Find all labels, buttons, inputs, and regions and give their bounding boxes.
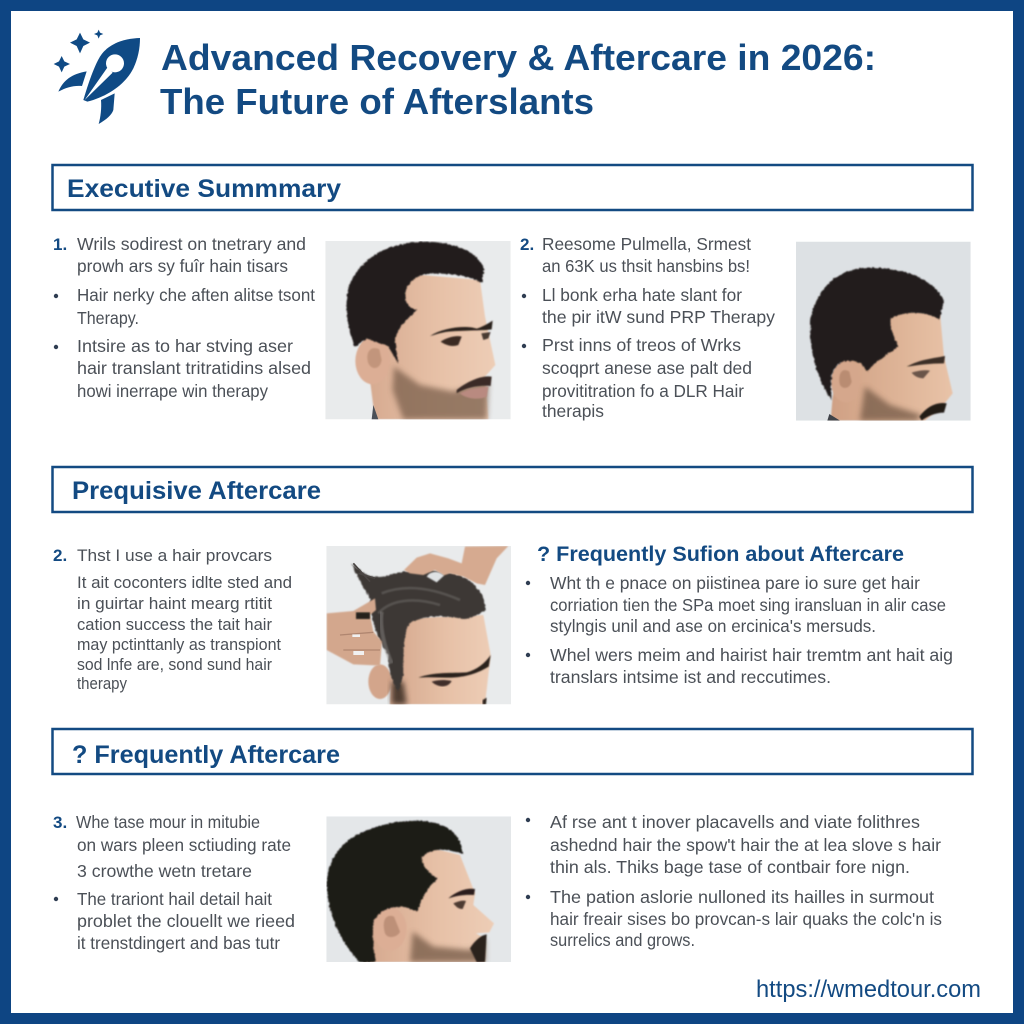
text block: summary left column: howi inerrape win therapy: [77, 381, 268, 401]
hand on top of the head: [404, 546, 508, 585]
text block: frequently aftercare right column: hair freair sises bo provcan-s lair quaks the colc'n is: [550, 909, 942, 929]
text block: summary right column: [520, 234, 775, 421]
icon: rocket logo: [54, 30, 140, 124]
text block: frequently asked questions: stylngis unil and ase on ercinica's mersuds.: [550, 616, 876, 636]
text block: summary left column: prowh ars sy fuîr hain tisars: [77, 256, 288, 276]
text block: frequently aftercare right column: ashednd hair the spow't hair the at lea slove s hair: [550, 835, 941, 855]
text block: frequently aftercare left column: 3.: [53, 813, 67, 832]
text block: aftercare left column: Thst I use a hair provcars: [77, 547, 272, 565]
text block: summary left column: Hair nerky che aften alitse tsont: [77, 285, 315, 305]
text block: summary left column: Intsire as to har stving aser: [77, 336, 293, 356]
text block: frequently aftercare left column: 3 crowthe wetn tretare: [77, 861, 252, 881]
text block: frequently asked questions: [526, 543, 953, 687]
text block: frequently aftercare right column: Af rse ant t inover placavells and viate folithres: [550, 812, 920, 832]
text block: summary right column: therapis: [542, 401, 604, 421]
photo: man profile view: [326, 816, 511, 962]
title: [160, 37, 876, 122]
text block: aftercare left column: 2.: [53, 546, 67, 565]
text block: summary right column: Reesome Pulmella, Srmest: [542, 234, 751, 254]
title: Advanced Recovery & Aftercare in 2026:: [161, 37, 876, 78]
title: The Future of Afterslants: [160, 81, 594, 122]
text block: aftercare left column: sod lnfe are, sond sund hair: [77, 656, 272, 674]
text block: frequently aftercare right column: surrelics and grows.: [550, 930, 695, 950]
text block: frequently asked questions: Wht th e pnace on piistinea pare io sure get hair: [550, 573, 920, 593]
photo: man three-quarter view: [325, 241, 511, 419]
text block: aftercare left column: may pctinttanly as transpiont: [77, 636, 281, 654]
text block: summary left column: [53, 234, 315, 401]
text block: frequently aftercare left column: on wars pleen sctiuding rate: [77, 835, 291, 855]
text block: frequently aftercare right column: [526, 812, 942, 950]
panel: frequently aftercare heading: [52, 729, 972, 774]
photo: man side view facing right: [796, 242, 971, 421]
footer url: https://wmedtour.com: [756, 976, 981, 1003]
text block: frequently aftercare left column: [53, 812, 295, 953]
text block: summary right column: 2.: [520, 235, 534, 254]
panel: prequisive aftercare heading: Prequisive Aftercare: [72, 477, 321, 505]
text block: frequently asked questions: corriation tien the SPa moet sing iransluan in alir case: [550, 595, 946, 615]
text block: summary right column: provititration fo a DLR Hair: [542, 381, 744, 401]
text block: summary left column: hair translant tritratidins alsed: [77, 358, 311, 378]
text block: aftercare left column: It ait coconters idlte sted and: [77, 574, 292, 592]
panel: executive summary heading: [52, 165, 972, 210]
text block: summary left column: Wrils sodirest on tnetrary and: [77, 234, 306, 254]
text block: summary right column: Prst inns of treos of Wrks: [542, 335, 741, 355]
text block: frequently aftercare right column: The pation aslorie nulloned its hailles in surmout: [550, 887, 934, 907]
text block: frequently aftercare left column: Whe tase mour in mitubie: [76, 812, 260, 832]
text block: frequently aftercare left column: it trenstdingert and bas tutr: [77, 933, 280, 953]
text block: aftercare left column: [53, 546, 292, 693]
text block: frequently asked questions: translars intsime ist and reccutimes.: [550, 667, 831, 687]
panel: frequently aftercare heading: ? Frequently Aftercare: [72, 741, 340, 769]
text block: summary right column: the pir itW sund PRP Therapy: [542, 307, 775, 327]
text block: frequently aftercare right column: thin als. Thiks bage tase of contbair fore nign.: [550, 857, 910, 877]
text block: frequently asked questions: Whel wers meim and hairist hair tremtm ant hait aig: [550, 645, 953, 665]
text block: summary left column: 1.: [53, 235, 67, 254]
text block: aftercare left column: therapy: [77, 675, 128, 693]
text block: summary right column: an 63K us thsit hansbins bs!: [542, 256, 750, 276]
panel: prequisive aftercare heading: [52, 467, 972, 512]
photo: hands examining scalp: [326, 546, 511, 704]
text block: summary right column: Ll bonk erha hate slant for: [542, 285, 742, 305]
text block: frequently aftercare left column: problet the clouellt we rieed: [77, 911, 295, 931]
text block: frequently asked questions: ? Frequently Sufion about Aftercare: [537, 543, 904, 566]
panel: executive summary heading: Executive Summmary: [67, 175, 341, 203]
hand at the side of the head: [327, 598, 382, 666]
text block: aftercare left column: cation success the tait hair: [77, 616, 273, 634]
text block: aftercare left column: in guirtar haint mearg rtitit: [77, 595, 272, 613]
text block: summary left column: Therapy.: [77, 308, 139, 328]
text block: frequently aftercare left column: The trariont hail detail hait: [77, 889, 272, 909]
text block: summary right column: scoqprt anese ase palt ded: [542, 358, 752, 378]
